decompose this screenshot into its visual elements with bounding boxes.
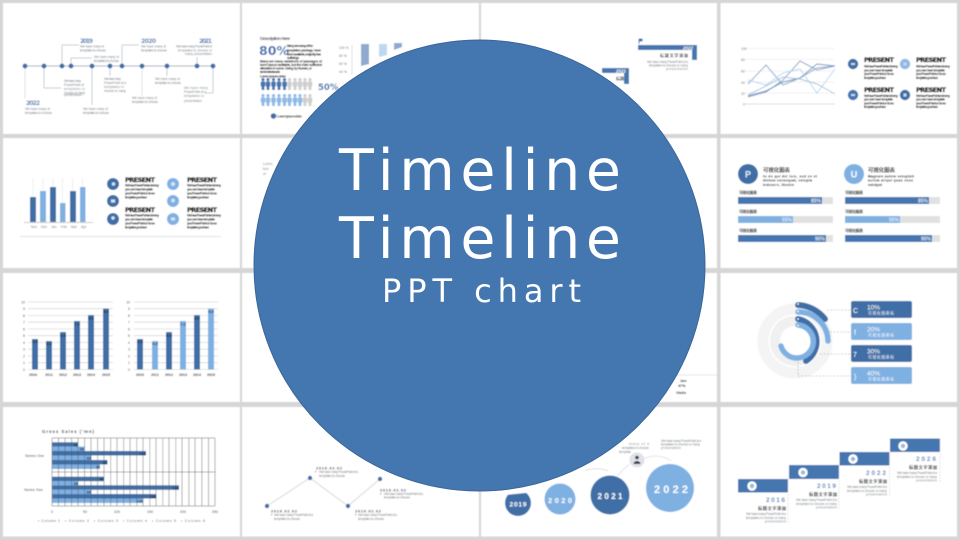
slide: description with people icons: lorem ipsum available, but the main sufficient [260,63,323,67]
slide: horizontal timeline 2019-2022: We have many of [80,44,104,48]
slide: line chart with four notes: you can have template [864,98,893,102]
slide: two column charts: 2013 [179,373,187,377]
slide: progress bars: In do qui del lum, sed ex et [763,174,818,178]
slide: progress bars: 可视化图表 [763,166,790,174]
slide: horizontal timeline 2019-2022: We have many of [132,96,157,100]
slide: progress bars: 可视化图表 [868,166,895,174]
slide: centre lower right with table fragment: Jan [680,379,687,383]
slide: two column charts: 5 [23,334,25,338]
slide: donut with percentage cards: 10% [867,304,880,312]
slide: gross sales bar chart: 0 [51,510,53,514]
slide: progress bars: 85% [918,198,929,204]
slide: two column charts: 2014 [87,373,95,377]
slide: horizontal timeline 2019-2022: templates to choose [80,48,106,52]
slide: progress bars: 55% [782,218,793,224]
slide: growing year circles: We have many PowerPoint of a [661,439,701,443]
slide: horizontal timeline 2019-2022: presentation [184,99,202,103]
slide: description with people icons: Many are many variations of passages of [260,60,323,64]
slide: progress bars: 可视化图表 [739,190,757,195]
slide: column chart with six icons: We have PowerPoint and many [125,214,159,218]
slide: line chart with four notes: We have PowerPoint and many [864,64,898,68]
slide: gross sales bar chart: ▪ Column 5 [152,519,176,523]
slide: gross sales bar chart: 60 [87,490,91,494]
slide: column chart with six icons: PRESENT [125,176,156,184]
slide: two column charts: 1 [23,361,25,365]
slide: column chart with six icons: you can have template [187,188,215,192]
slide: gross sales bar chart: ▪ Column 1 [38,519,60,523]
slide: two column charts: 5.5 [166,333,173,338]
slide: line chart with four notes: templates you have [916,105,938,109]
slide: staircase timeline: 标题文字添加 [859,478,887,485]
slide: growing year circles: template [619,450,631,454]
slide: two column charts: 4.5 [32,339,39,344]
slide: two column charts: 5 [128,334,130,338]
slide: two column charts: 4.3 [152,341,159,346]
slide: staircase timeline: We have many PowerPoint of a [796,498,837,502]
slide: gross sales bar chart: ▪ Column 4 [123,519,147,523]
slide: two column charts: 3 [23,348,25,352]
slide: growing year circles: 2019 [510,502,527,508]
slide: two column charts: 1 [128,361,130,365]
slide: progress bars: inducere, illustre [763,183,794,187]
slide: two column charts: 8 [23,314,25,318]
slide: zig-zag timeline: 2019.02.02 [355,508,382,514]
slide: stepped years (upper right): presentation [666,67,688,71]
slide: gross sales bar chart [3,407,240,536]
slide: two column charts: 2010 [136,373,144,377]
slide: description with people icons: 40 % [339,70,347,74]
slide: line chart with four notes: 40 [741,81,745,85]
slide: gross sales bar chart: 160 [150,495,156,499]
slide: line chart with four notes: templates you have [916,76,938,80]
slide: donut with percentage cards: 可视化图表标 [868,310,894,316]
slide: two column charts: 3 [128,348,130,352]
slide: description with people icons: 50% [318,83,339,93]
slide: two column charts: 4 [128,341,130,345]
slide: line chart with four notes: PRESENT [916,86,947,94]
slide: description with people icons: 60 % [339,62,347,66]
slide: column chart with six icons: templates you have [187,226,209,230]
slide: horizontal timeline 2019-2022: We have many of [94,55,119,59]
slide: two column charts: 2014 [193,373,201,377]
slide: two column charts: 2012 [59,373,67,377]
slide: centre left, hidden by circle: Lorem [263,162,273,166]
slide: horizontal timeline 2019-2022: 2020 [141,38,156,45]
slide: gross sales bar chart: 85 [103,461,107,465]
slide: stepped years (upper right) [481,3,717,134]
slide: line chart with four notes: PRESENT [864,56,895,64]
slide: gross sales bar chart: ▪ Column 2 [65,519,89,523]
slide: two column charts: 9 [128,307,130,311]
slide: staircase timeline: presentation [916,478,937,482]
slide: line chart with four notes: templates you have [864,105,886,109]
slide: progress bars: U [851,170,857,180]
slide: horizontal timeline 2019-2022: templates to choose [155,81,181,85]
slide: gross sales bar chart: ▪ Column 6 [181,519,205,523]
slide: gross sales bar chart: 40 [74,444,78,448]
slide: zig-zag timeline: 2019.02.02 [316,466,343,470]
people row light [261,94,312,106]
slide: gross sales bar chart: 250 [212,510,218,514]
slide: stepped years (upper right): 2021 [615,68,627,74]
slide: horizontal timeline 2019-2022: PowerPoint of a [104,81,126,85]
slide: horizontal timeline 2019-2022: We have many of [141,44,166,48]
slide: staircase timeline: presentation [765,520,786,524]
slide: line chart with four notes: you PowerPoint or do so [916,72,946,76]
slide: staircase timeline: 2022 [866,470,886,477]
slide: two column charts: 4.5 [137,339,144,344]
slide: two column charts: 2011 [151,373,159,377]
slide: description with people icons: sufferings [287,56,299,60]
slide: progress bars: 可视化图表 [845,209,863,214]
slide: column chart with six icons: Jan [51,225,57,229]
slide: staircase timeline: 2016 [766,497,785,504]
slide: horizontal timeline 2019-2022: 2021 [199,38,212,45]
slide: horizontal timeline 2019-2022: choose or many [64,91,85,95]
slide: donut with percentage cards: 可视化图表标 [868,332,894,338]
slide: centre right, hidden by circle [481,138,717,268]
slide: line chart with four notes: PRESENT [916,56,947,64]
slide: donut with percentage cards: f [854,330,856,337]
slide: description with people icons: Lorem ipsum dolor [260,74,287,78]
slide: two column charts: 0 [128,368,130,372]
slide: staircase timeline: 标题文字添加 [809,491,837,498]
slide: centre left, hidden by circle [242,138,479,268]
slide: line chart with four notes: 20 [741,92,745,96]
subtitle: PPT chart [382,272,581,310]
slide: staircase timeline: presentation [866,492,887,496]
slide: stepped years (upper right): 标题 [616,75,624,81]
slide: horizontal timeline 2019-2022: templates to choose or [178,48,213,52]
slide: horizontal timeline 2019-2022: many presentation [185,52,212,56]
slide: progress bars: dictum consequat, volupta [763,178,812,182]
slide: progress bars: 90% [815,236,826,242]
slide: description with people icons: randomised words [260,70,280,74]
slide: line chart with four notes: you can have template [864,68,893,72]
slide: staircase timeline: 2019 [817,483,836,490]
slide: two column charts: 7.2 [180,322,187,326]
slide: line chart with four notes: templates you have [864,76,886,80]
slide: description with people icons [242,3,479,134]
slide: centre lower right with table fragment: Visits [676,391,686,395]
slide: horizontal timeline 2019-2022: templates to choose [25,111,52,115]
slide: donut with percentage cards: C [853,308,858,315]
slide: gross sales bar chart: 60 [87,456,91,460]
slide: staircase timeline [720,407,957,536]
slide: growing year circles [481,407,717,536]
slide: column chart with six icons: templates you have [187,196,209,200]
slide: description with people icons: 100 % [339,46,349,50]
slide: staircase timeline: templates to choose or many [847,489,887,493]
slide: horizontal timeline 2019-2022: presentation [64,93,82,97]
slide: growing year circles: templates to choose [622,446,649,450]
slide: two column charts: 6 [23,328,25,332]
slide: staircase timeline: We have many PowerPoint of a [847,485,887,489]
slide: column chart with six icons [3,138,240,268]
slide: staircase timeline: 标题文字添加 [909,464,937,471]
slide: column chart with six icons: templates you have [125,226,147,230]
slide: gross sales bar chart: Series One [25,454,44,458]
slide: zig-zag timeline: We have many PowerPoint of a [358,513,397,517]
slide: gross sales bar chart: 145 [140,452,146,456]
slide: progress bars: Magnam autem voluptati [868,174,914,178]
slide: column chart with six icons: Feb [61,225,67,229]
title line 2: Timeline [338,206,621,272]
slide: column chart with six icons: We have PowerPoint and many [125,184,159,188]
slide: line chart with four notes: PRESENT [864,86,895,94]
slide: two column charts: 2011 [45,373,53,377]
slide: column chart with six icons: We have PowerPoint and many [187,214,221,218]
slide: gross sales bar chart: 75 [96,466,100,470]
slide: horizontal timeline 2019-2022: templates to [104,85,124,89]
slide: two column charts: 9.0 [103,309,110,314]
slide: donut with percentage cards: 可视化图表标 [868,354,894,360]
slide: progress bars: volutpat [868,183,883,187]
slide: zig-zag timeline: templates to choose [358,517,384,521]
slide: progress bars: 可视化图表 [845,190,863,195]
slide: zig-zag timeline: 2019.02.02 [380,488,407,492]
slide: staircase timeline: templates to choose or many [897,475,937,479]
slide: gross sales bar chart: 40 [74,482,78,486]
slide: description with people icons: templates package, have [287,48,321,52]
slide: column chart with six icons: you can have template [187,218,215,222]
slide: column chart with six icons: We have PowerPoint and many [187,184,221,188]
slide: line chart with four notes: 100 [741,47,747,51]
slide: two column charts: 5.5 [60,333,67,338]
slide: stepped years (upper right): 标题文字添加 [660,52,688,58]
slide: description with people icons: been available, majority has [287,52,321,56]
slide: line chart with four notes: 0 [743,102,745,106]
slide: zig-zag timeline: 2019.02.02 [271,508,298,514]
slide: growing year circles: 2022 [654,484,688,496]
slide: two column charts: 2 [23,354,25,358]
slide: line chart with four notes: you PowerPoint or do so [864,72,894,76]
slide: horizontal timeline 2019-2022: We have many [184,86,208,90]
slide: line chart with four notes: We have PowerPoint and many [916,94,950,98]
slide: progress bars: 可视化图表 [739,209,757,214]
slide: horizontal timeline 2019-2022: We have many of [83,107,108,111]
slide: staircase timeline: We have many PowerPoint of a [746,512,786,516]
slide: centre lower right with table fragment [481,273,717,402]
slide: zig-zag timeline: templates to choose [319,474,345,478]
slide: horizontal timeline 2019-2022: templates to [184,94,204,98]
slide: line chart with four notes: 60 [741,70,745,74]
slide: line chart with four notes: 80 [741,58,745,62]
slide: staircase timeline: 标题文字添加 [758,505,786,512]
slide: horizontal timeline 2019-2022: templates to choose [94,59,119,63]
slide: description with people icons: 80 % [339,54,347,58]
slide: column chart with six icons: Dec [41,225,47,229]
slide: zig-zag timeline: templates to choose [384,496,410,500]
slide: progress bars: P [745,170,751,180]
slide: donut with percentage cards: 30% [867,348,880,356]
slide: line chart with four notes: you can have template [916,98,945,102]
slide: horizontal timeline 2019-2022: templates to choose [141,48,167,52]
slide: two column charts: 4 [23,341,25,345]
slide: line chart with four notes: you can have template [916,68,945,72]
slide: gross sales bar chart: ▪ Column 3 [94,519,118,523]
slide: column chart with six icons: you can have template [125,218,153,222]
slide: description with people icons: alteration in some. Using by Human, or [260,66,313,70]
slide: two column charts: 8.0 [88,316,95,320]
slide: donut with percentage cards [720,273,957,402]
slide: horizontal timeline 2019-2022: templates to [64,87,85,91]
slide: description with people icons: Many are many of the [287,44,313,48]
slide: staircase timeline: 2026 [916,456,936,463]
slide: line chart with four notes: We have PowerPoint and many [916,64,950,68]
slide: column chart with six icons: PRESENT [125,206,156,214]
slide: two column charts: 2 [128,354,130,358]
slide: zig-zag timeline: We have many PowerPoint of a [274,513,313,517]
slide: zig-zag timeline: templates to choose [274,517,300,521]
slide: progress bars: 可视化图表 [739,228,757,233]
slide: column chart with six icons: PRESENT [187,176,218,184]
title line 1: Timeline [338,138,621,204]
slide: zig-zag timeline: We have many PowerPoint of a [319,470,358,474]
slide: column chart with six icons: Mar [71,225,78,229]
slide: donut with percentage cards: 40% [867,370,880,378]
slide: stepped years (upper right): We have many PowerPoint of a [647,60,688,64]
slide: donut with percentage cards: 20% [867,326,880,334]
slide: column chart with six icons: templates you have [125,196,147,200]
slide: centre lower right with table fragment: 47% [678,384,686,388]
slide: progress bars: 可视化图表 [845,228,863,233]
slide: column chart with six icons: Nov [31,225,37,229]
slide: progress bars: 55% [889,218,900,224]
slide: horizontal timeline 2019-2022 [3,3,240,134]
slide: description with people icons: 80% [259,43,289,58]
slide: horizontal timeline 2019-2022: We have many of [25,107,50,111]
slide: gross sales bar chart: 200 [180,510,186,514]
slide: growing year circles: 2020 [548,496,572,505]
slide: staircase timeline: templates to choose or many [796,502,837,506]
slide: growing year circles: 2021 [598,492,623,501]
slide: donut with percentage cards: ) [854,374,856,381]
slide: centre left, hidden by circle: text [263,167,269,171]
slide: two column charts: 0 [23,368,25,372]
slide: growing year circles: many of a [629,442,649,446]
slide: horizontal timeline 2019-2022: 2022 [26,100,40,107]
slide: growing year circles: templates to choose or many [661,442,700,446]
slide: two column charts: 2015 [207,373,215,377]
slide: line chart with four notes: We have PowerPoint and many [864,94,898,98]
slide: column chart with six icons: you PowerPoint or do so [125,222,155,226]
slide: column chart with six icons: you can have template [125,188,153,192]
slide: line chart with four notes [720,3,957,134]
slide: staircase timeline: presentation [816,506,837,510]
slide: column chart with six icons: Apr [81,225,87,229]
slide: donut with percentage cards: 7 [853,352,857,359]
central circle with title [254,40,705,491]
slide: two column charts: 6 [128,328,130,332]
slide: stepped years (upper right): templates to choose or many [649,64,688,68]
slide: two column charts: 7 [23,320,25,324]
slide: two column charts: 9.0 [208,309,215,314]
slide: gross sales bar chart: 195 [173,486,179,490]
slide: progress bars: 90% [921,236,932,242]
slide: gross sales bar chart: 150 [147,510,153,514]
slide: description with people icons: Description Here [260,36,290,41]
slide: two column charts: 2013 [73,373,81,377]
slide: donut with percentage cards: 可视化图表标 [868,376,894,382]
slide: two column charts: 2010 [29,373,37,377]
slide: progress bars: autem aliqui quas esse [868,178,913,182]
slide: stepped years (upper right): 2022 [682,46,694,50]
slide: two column charts: 9 [23,307,25,311]
slide: staircase timeline: templates to choose or many [746,516,786,520]
slide: gross sales bar chart: Gross Sales (’mn) [42,429,95,434]
slide: two column charts: 10 [21,300,25,304]
slide: gross sales bar chart: 100 [114,510,120,514]
slide: two column charts: 8.0 [194,316,201,320]
slide: horizontal timeline 2019-2022: 2019 [80,38,93,45]
slide: two column charts: 2015 [102,373,110,377]
slide: horizontal timeline 2019-2022: We have many [64,79,81,83]
mask clipping top of 2019 circle [503,484,535,495]
slide: horizontal timeline 2019-2022: We have many [104,77,121,81]
slide: line chart with four notes: you PowerPoint or do so [864,102,894,106]
slide: gross sales bar chart: 50 [83,510,87,514]
slide: two column charts: 8 [128,314,130,318]
slide: growing year circles: presentation [661,446,681,450]
slide: centre left, hidden by circle: of [263,172,266,176]
slide: zig-zag timeline: We have many PowerPoint of a [384,492,423,496]
slide: horizontal timeline 2019-2022: PowerPoint of [64,83,84,87]
slide: zig-zag timeline [242,407,479,536]
slide: two column charts: 10 [126,300,130,304]
slide: horizontal timeline 2019-2022: choose or many [104,89,126,93]
slide: gross sales bar chart: Series Two [24,488,43,492]
slide: gross sales bar chart: 140 [137,500,143,504]
slide: column chart with six icons: you PowerPoint or do so [187,192,217,196]
slide: column chart with six icons: PRESENT [187,206,218,214]
slide: description with people icons: Lorem ipsum dolor [277,114,303,118]
slide: horizontal timeline 2019-2022: PowerPoint of a [184,90,206,94]
slide: line chart with four notes: you PowerPoint or do so [916,102,946,106]
slide: two column charts: 7.2 [74,322,81,326]
slide: horizontal timeline 2019-2022: templates to choose [132,100,158,104]
slide: gross sales bar chart: 80 [100,478,104,482]
slide: two column charts: 4.3 [46,341,53,346]
slide: horizontal timeline 2019-2022: We have many of [155,77,180,81]
slide: centre lower left, hidden by circle [242,273,479,402]
slide: horizontal timeline 2019-2022: templates to choose [83,111,109,115]
people row dark [261,78,312,90]
slide: horizontal timeline 2019-2022: We have many PowerPoint of [176,44,212,48]
slide: progress bars [720,138,957,268]
slide: two column charts: 7 [128,320,130,324]
slide: gross sales bar chart: 50 [80,448,84,452]
slide: staircase timeline: We have many PowerPoint of a [897,471,937,475]
slide: two column charts [3,273,240,402]
slide: progress bars: 85% [811,198,822,204]
slide: two column charts: 2012 [165,373,173,377]
slide: column chart with six icons: you PowerPoint or do so [125,192,155,196]
slide: column chart with six icons: you PowerPoint or do so [187,222,217,226]
